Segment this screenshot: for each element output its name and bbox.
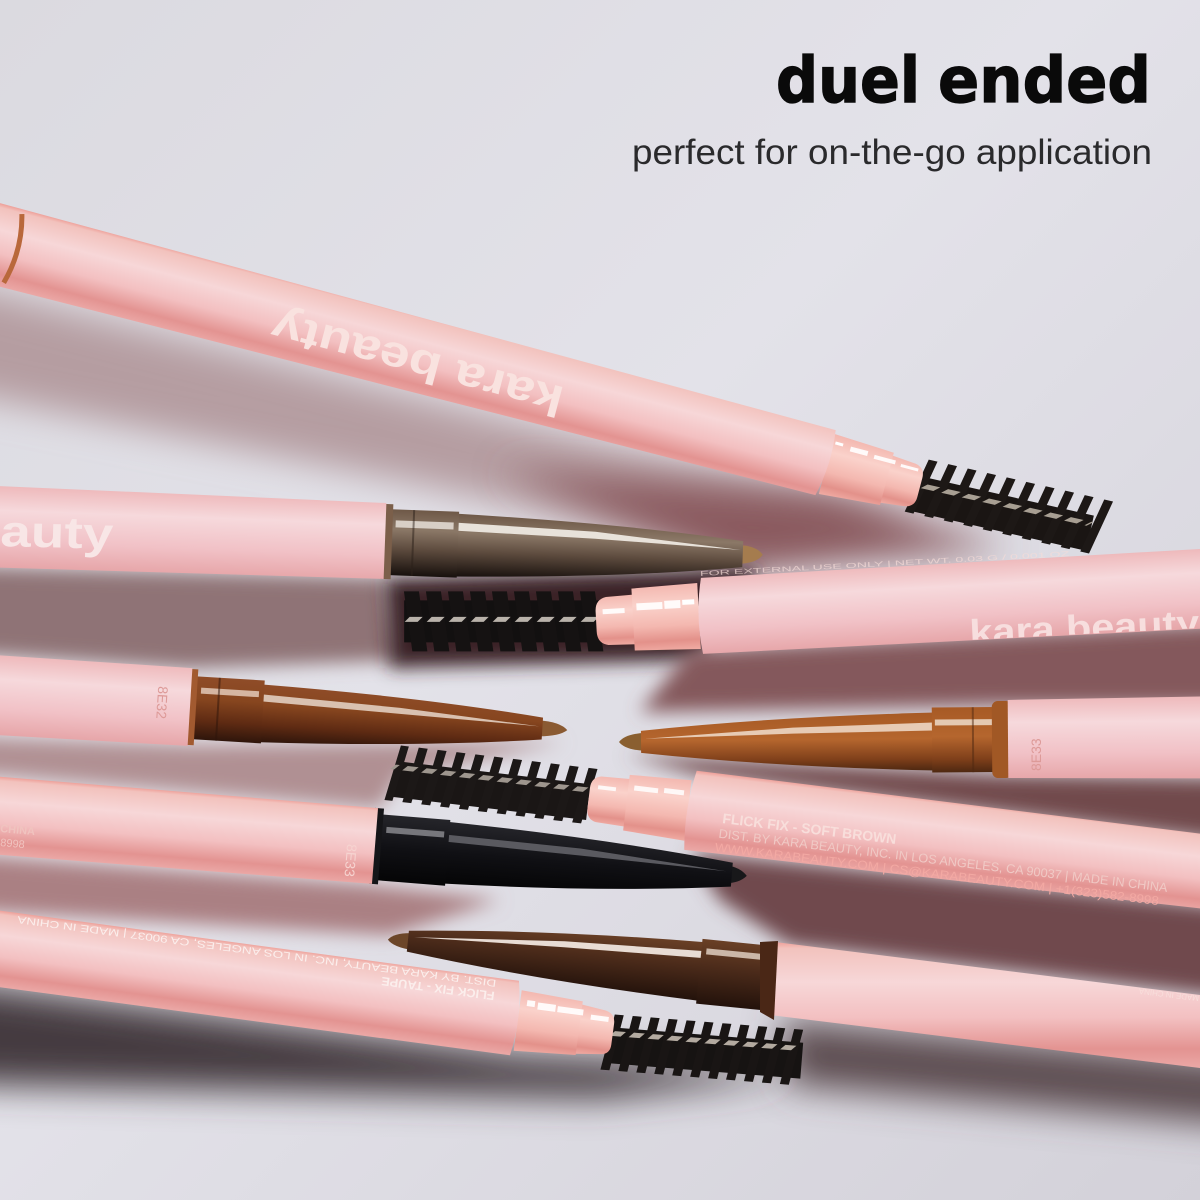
flange [992,701,1012,778]
small text: china: 8998 [0,837,25,851]
small text: china: CHINA [0,823,36,838]
pencil 8 label text: FLICK FIX - TAUPE [381,974,495,1003]
spoolie brush [914,485,1102,536]
brand text: kara beauty: kara beauty [265,302,569,426]
flange [381,504,393,579]
pencil 8 label text [14,913,497,1003]
pencil 3: spoolie facing left [403,547,1200,672]
barrel [1008,696,1200,780]
barrel [696,547,1200,656]
ferrule [595,594,640,647]
barrel [0,654,192,747]
orange cone [641,713,935,773]
collar [389,509,459,578]
pencil label text: WWW.KARABEAUTY.COM | CS@KARABEAUTY.COM | +1(323)582-8998 [714,840,1160,908]
tip [736,545,763,565]
barrel [0,485,387,582]
ferrule [586,774,631,827]
pencil 4: rust tip [0,654,570,770]
collar [932,707,998,773]
barrel [0,775,378,885]
black cone [442,822,734,907]
brand text: auty: auty [0,507,115,559]
spoolie brush [607,1033,803,1061]
tip [387,931,415,950]
chocolate cone [405,913,707,1001]
tip [619,733,645,751]
taupe cone [452,514,744,587]
shade number 8E33 right: 8E33 [1028,738,1044,771]
shade number: 8E33 [341,844,360,878]
title: ended [938,44,1151,117]
cast shadows [0,270,1200,1130]
pencil label text: DIST. BY KARA BEAUTY, INC. IN LOS ANGELES, CA 90037 | MADE IN CHINA [718,827,1169,895]
pink barrel with logo [0,202,839,503]
shade number: 8E32 [153,686,171,720]
barrel of pencil 9: MADE IN CHINA [1138,986,1199,1003]
small text on pencil 3: FOR EXTERNAL USE ONLY | NET WT. 0.03 G / 0.001 OZ [700,551,1071,578]
flange [185,669,198,745]
pencil 9: chocolate tip [385,908,770,1010]
ferrule [879,455,926,512]
collar [377,815,450,886]
small text: china [0,823,36,851]
spoolie brush [404,619,599,621]
pencil label text: FLICK FIX - SOFT BROWN [722,810,897,847]
pencil label text [714,810,1171,909]
title: duel [776,44,920,117]
pencil 5: orange tip [619,696,1200,783]
barrel ring [4,214,27,284]
pencil 6: black tip [0,775,750,915]
pencil 7: spoolie with label [387,735,1200,914]
barrel [0,906,523,1056]
pencil 8 label text: DIST. BY KARA BEAUTY, INC. IN LOS ANGELES, CA 90037 | MADE IN CHINA [16,913,497,988]
ferrule [574,1004,616,1058]
pencil 8: bottom spoolie [0,906,807,1094]
rust cone [256,684,544,759]
pencil 2: taupe tip [0,485,764,596]
subtitle: perfect for on-the-go application [632,133,1152,172]
tip [537,720,568,738]
collar [696,939,770,1010]
barrel of pencil 9 [760,941,1200,1068]
collar [193,676,265,743]
pencil 1: top spoolie [0,202,1111,575]
brand text: clipped logo: kara beauty [969,602,1200,653]
title [776,44,1151,117]
flange [369,808,384,884]
tip [725,865,748,885]
barrel [682,770,1200,914]
spoolie brush [392,767,590,802]
